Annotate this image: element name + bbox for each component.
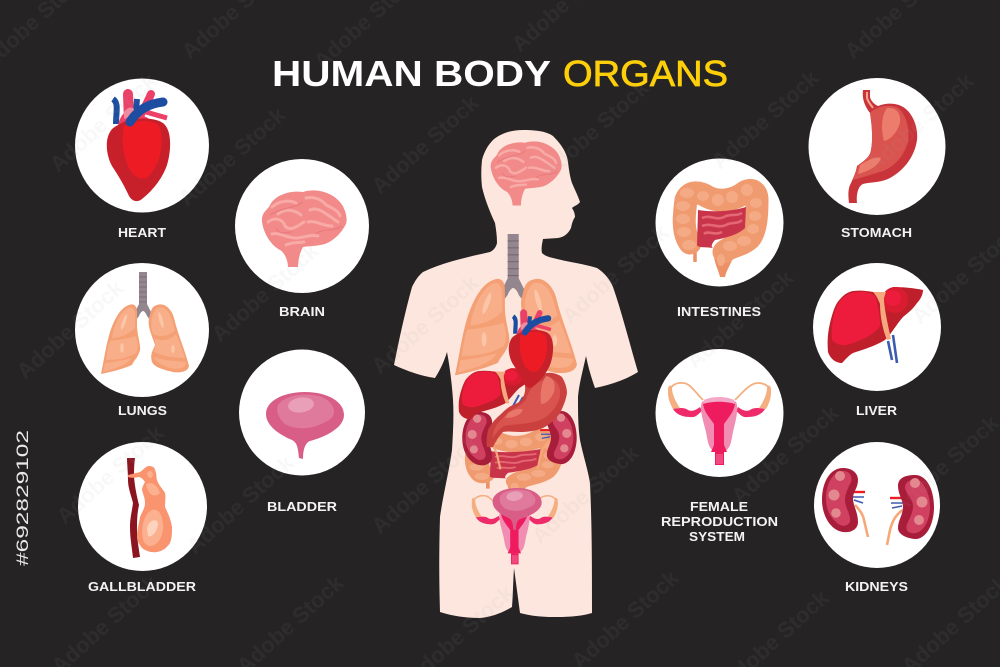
panel: stomach xyxy=(808,78,946,240)
panel: heart: HEART xyxy=(118,226,166,240)
body organ: liver vessels xyxy=(512,395,523,409)
watermark: Adobe Stock: Adobe Stock xyxy=(557,220,674,329)
panel: female reproduction system: FEMALE xyxy=(690,500,748,514)
panel: intestines xyxy=(656,158,784,319)
watermark: Adobe Stock: Adobe Stock xyxy=(682,265,799,374)
watermark: Adobe Stock: Adobe Stock xyxy=(45,68,162,177)
panel: intestines: INTESTINES xyxy=(677,305,761,319)
panel: kidneys: KIDNEYS xyxy=(845,580,908,594)
panel: kidneys xyxy=(814,442,940,594)
panel: lungs xyxy=(75,263,209,418)
body organ: uterus xyxy=(472,496,558,564)
panel: liver: LIVER xyxy=(856,404,897,418)
watermark: Adobe Stock: Adobe Stock xyxy=(707,65,824,174)
watermark: Adobe Stock: Adobe Stock xyxy=(887,410,1000,519)
watermark: Adobe Stock: Adobe Stock xyxy=(12,275,129,384)
title xyxy=(272,53,728,94)
panel: liver xyxy=(813,263,941,418)
central body figure with organs xyxy=(394,130,638,618)
panel: bladder xyxy=(239,350,365,514)
panel: lungs: LUNGS xyxy=(118,404,167,418)
watermark: Adobe Stock: Adobe Stock xyxy=(207,238,324,347)
watermark: Adobe Stock: Adobe Stock xyxy=(537,75,654,184)
watermark: Adobe Stock: Adobe Stock xyxy=(727,400,844,509)
body silhouette xyxy=(394,130,638,618)
body organ: lungs and trachea xyxy=(455,234,577,375)
panel: heart xyxy=(75,78,209,240)
panel: bladder: BLADDER xyxy=(267,500,337,514)
body organ: left kidney xyxy=(462,412,500,469)
panel: brain xyxy=(235,159,369,319)
body organ: liver xyxy=(459,368,535,419)
watermark: Adobe Stock: Adobe Stock xyxy=(367,270,484,379)
watermark: Adobe Stock: Adobe Stock xyxy=(182,450,299,559)
panel: stomach: STOMACH xyxy=(841,226,912,240)
body organ: right kidney xyxy=(538,411,577,469)
body organ: intestines xyxy=(468,432,557,499)
watermark: Adobe Stock: Adobe Stock xyxy=(367,90,484,199)
panel: gallbladder: GALLBLADDER xyxy=(88,580,196,594)
body organ: heart xyxy=(509,313,553,388)
stock image id: #692829102 xyxy=(13,430,32,566)
body organ: brain xyxy=(491,141,562,205)
watermark: Adobe Stock: Adobe Stock xyxy=(52,420,169,529)
panel: female reproduction system: SYSTEM xyxy=(689,530,745,544)
watermark: Adobe Stock: Adobe Stock xyxy=(862,68,979,177)
panel: female reproduction system: REPRODUCTION xyxy=(661,515,778,529)
watermark: Adobe Stock: Adobe Stock xyxy=(367,430,484,539)
body organ: bladder xyxy=(493,488,542,530)
panel: brain: BRAIN xyxy=(279,305,325,319)
title: HUMAN BODY xyxy=(272,53,551,94)
watermark: Adobe Stock: Adobe Stock xyxy=(174,102,291,211)
body organ: stomach xyxy=(487,373,567,447)
panel: female reproduction system xyxy=(656,349,784,544)
panel: gallbladder xyxy=(78,442,207,594)
title: ORGANS xyxy=(563,53,728,94)
watermark: Adobe Stock: Adobe Stock xyxy=(527,440,644,549)
